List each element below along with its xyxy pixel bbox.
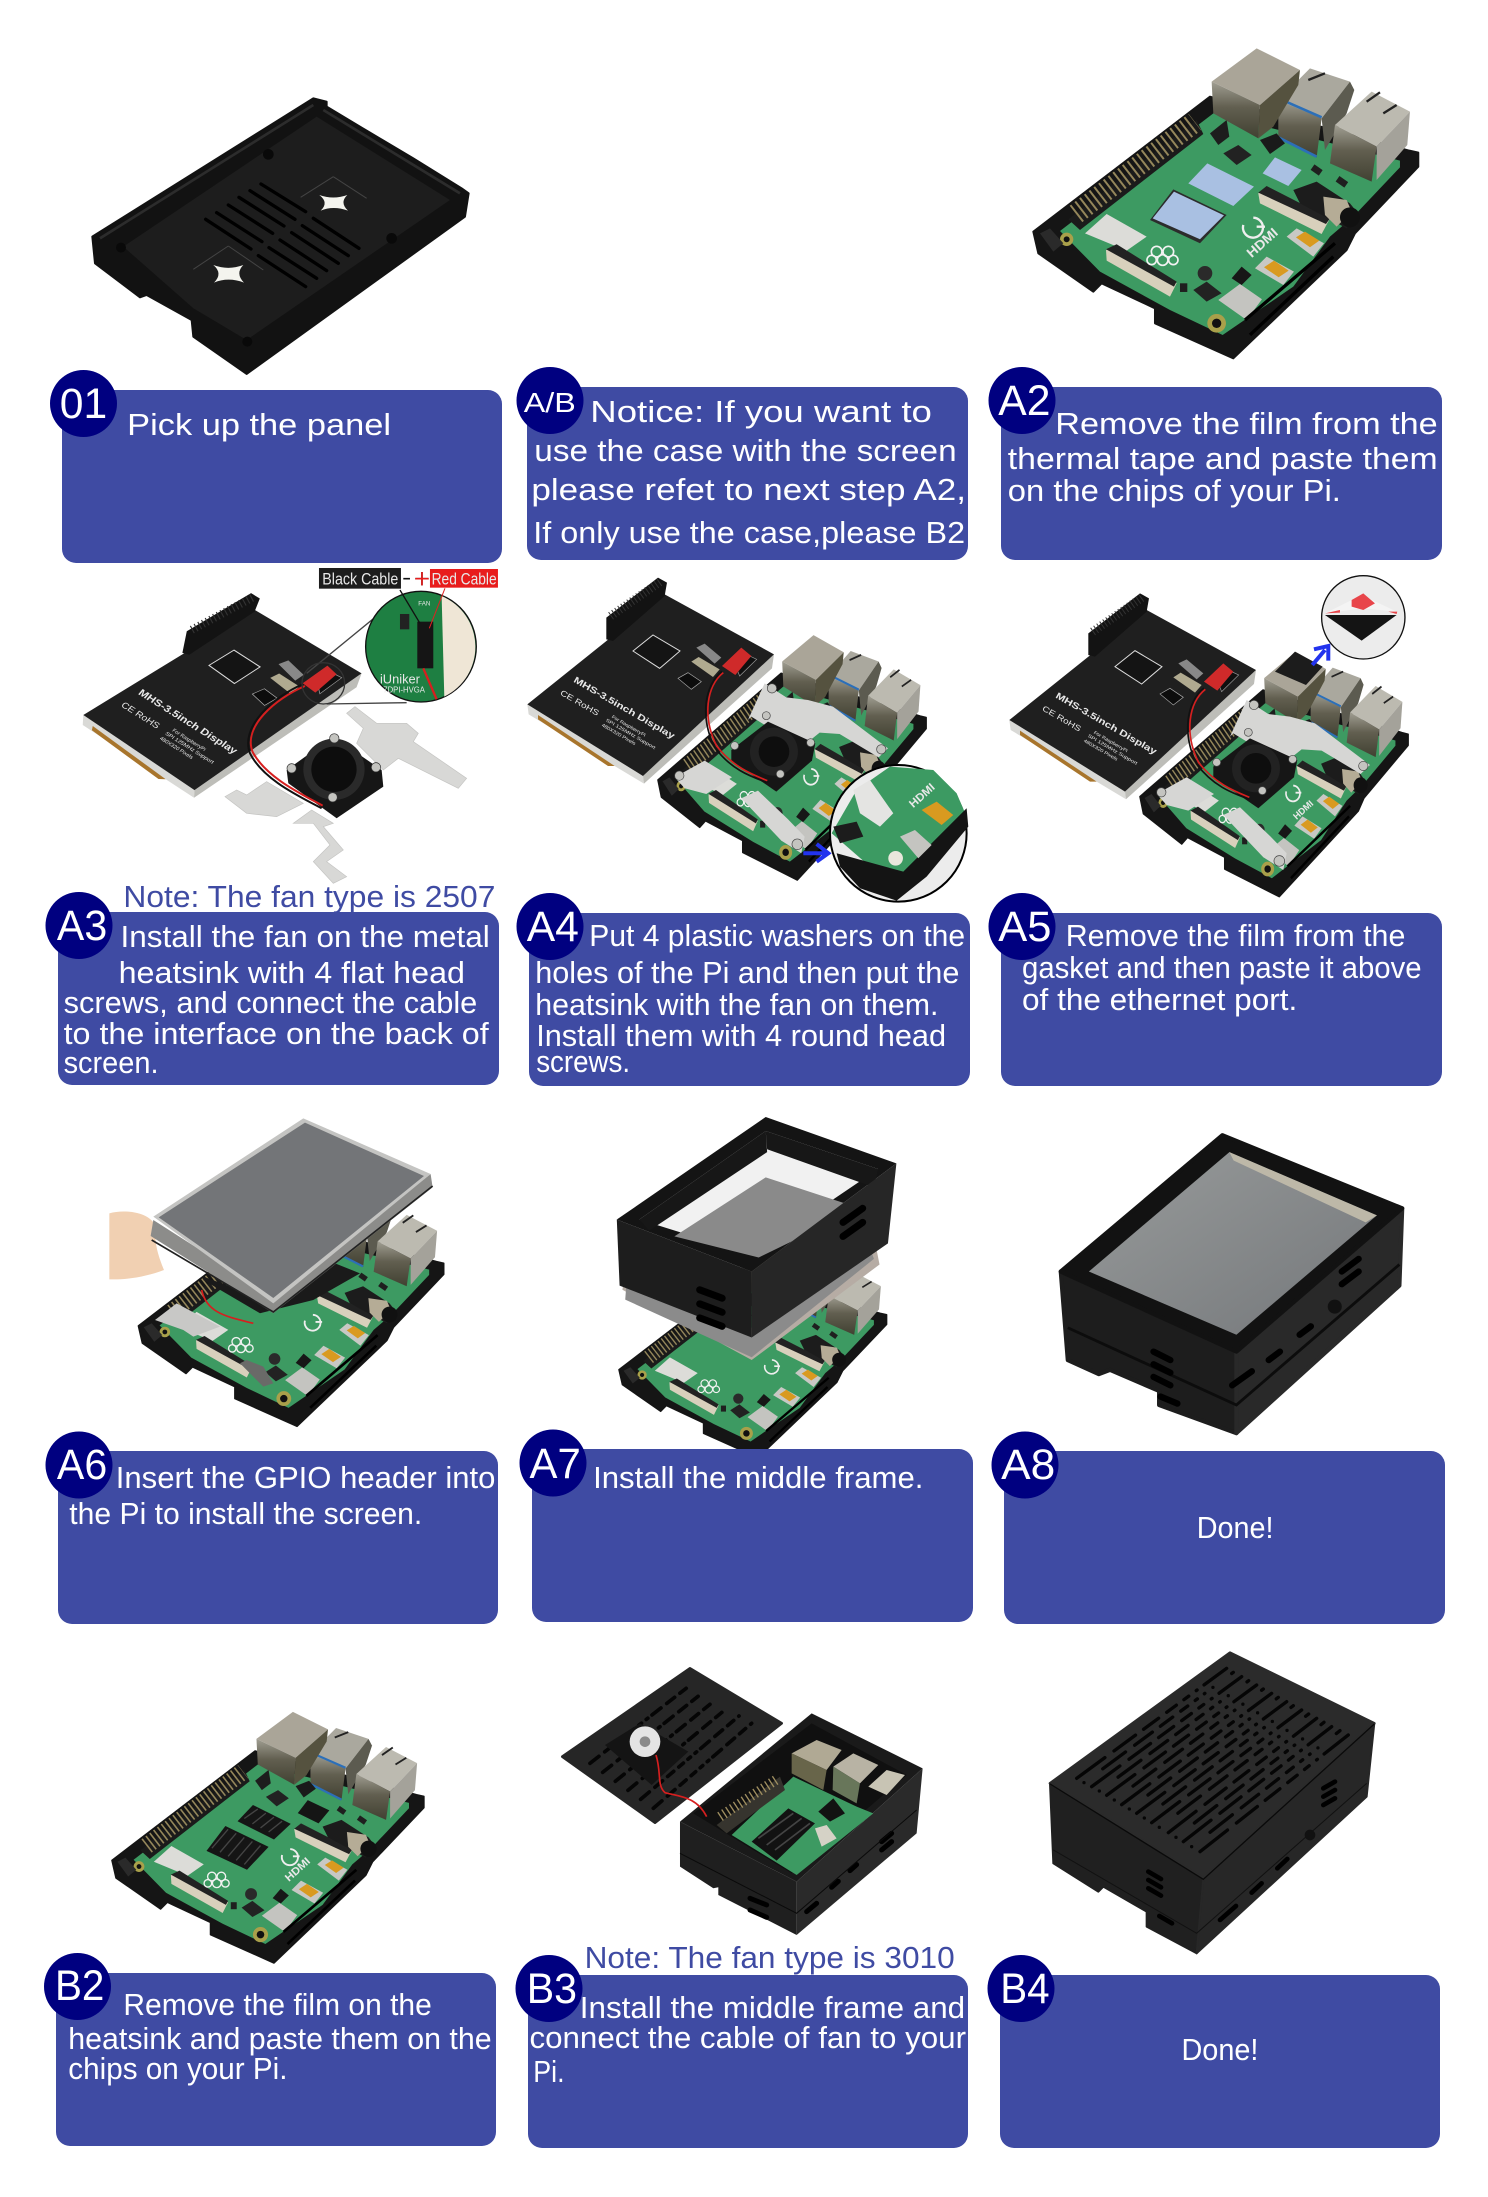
panel <box>528 1975 968 2148</box>
photo: case bottom panel <box>92 98 469 374</box>
arrow: to gasket inset <box>1312 646 1328 665</box>
instruction: holes of the Pi and then put the <box>535 955 959 990</box>
instruction: of the ethernet port. <box>1022 982 1297 1017</box>
instruction: Install the fan on the metal <box>120 919 490 954</box>
badge: A/B <box>524 387 576 418</box>
instruction <box>535 918 965 1079</box>
gasket on port <box>1275 652 1323 685</box>
step 01 <box>50 370 502 563</box>
badge <box>516 367 584 434</box>
fan <box>287 734 383 818</box>
instruction: use the case with the screen <box>534 433 957 468</box>
instruction: the Pi to install the screen. <box>69 1496 422 1531</box>
badge: A8 <box>1001 1441 1055 1489</box>
metal heatsink <box>225 707 467 883</box>
step B4 <box>988 1955 1440 2148</box>
instruction: Pick up the panel <box>127 407 391 442</box>
photo: Pi with heatsinks <box>112 1712 424 1963</box>
instruction: heatsink and paste them on the <box>68 2021 492 2056</box>
instruction: Insert the GPIO header into <box>116 1460 495 1495</box>
badge <box>46 1432 112 1498</box>
badge: A7 <box>530 1440 581 1488</box>
lid with fan <box>562 1668 782 1823</box>
arrow: to washer inset <box>803 844 828 862</box>
instruction: screen. <box>64 1045 158 1080</box>
inset: gasket <box>1322 576 1405 659</box>
open box <box>680 1713 923 1935</box>
instruction: please refet to next step A2, <box>531 472 966 507</box>
photo: gasket on ethernet port: CE RoHS <box>1041 704 1083 733</box>
instruction: Notice: If you want to <box>590 394 932 429</box>
step B3 <box>516 1955 968 2148</box>
badge: B2 <box>55 1962 104 2010</box>
instruction: chips on your Pi. <box>68 2051 288 2086</box>
badge <box>516 1955 582 2022</box>
display board: MHS-3.5inch Display <box>136 687 240 757</box>
step A/B <box>516 367 968 560</box>
fan cable <box>248 684 323 808</box>
photo: middle frame over the screen <box>617 1117 896 1458</box>
photo: gasket on ethernet port: For RaspberryPi <box>1093 730 1129 753</box>
instruction: heatsink with 4 flat head <box>119 955 465 990</box>
display board: SPI 125MHz Support <box>163 731 216 766</box>
badge <box>516 893 584 960</box>
badge: A5 <box>998 903 1052 951</box>
photo: screen and fan on metal heatsink <box>67 568 498 883</box>
badge <box>520 1430 586 1496</box>
step A4 <box>516 893 970 1086</box>
badge: A6 <box>57 1441 107 1489</box>
instruction: gasket and then paste it above <box>1022 950 1422 985</box>
instruction: screws, and connect the cable <box>64 985 477 1020</box>
display board: For RaspberryPi <box>171 728 207 753</box>
photo: Raspberry Pi with thermal pads: HDMI <box>1244 225 1281 261</box>
photo: fan heatsink installed on Pi <box>527 578 968 902</box>
magnifier lines <box>307 613 407 704</box>
panel <box>58 912 499 1085</box>
instruction <box>64 919 490 1080</box>
photo: gasket on ethernet port: HDMI <box>1291 798 1315 821</box>
side vents and ports <box>1148 1782 1335 1923</box>
panel <box>527 387 968 560</box>
instruction: heatsink with the fan on them. <box>535 987 938 1022</box>
note: fan type 2507: Note: The fan type is 2507 <box>123 879 495 914</box>
badge <box>46 892 112 959</box>
instruction: Install the middle frame. <box>593 1460 923 1495</box>
instruction: connect the cable of fan to your <box>530 2020 966 2055</box>
panel <box>62 390 502 563</box>
inset: fan header: iUniker <box>380 672 420 686</box>
badge: A2 <box>998 377 1050 425</box>
photo: inserting screen on the Pi <box>109 1118 444 1426</box>
step A7 <box>520 1430 973 1622</box>
instruction <box>530 1990 966 2089</box>
display board <box>67 589 377 802</box>
instruction <box>69 1460 495 1531</box>
badge <box>50 370 117 437</box>
photo: Raspberry Pi with thermal pads <box>1033 48 1418 358</box>
touch screen <box>151 1118 433 1313</box>
step A3 <box>46 892 499 1085</box>
panel <box>56 1973 496 2146</box>
panel <box>1001 913 1442 1086</box>
instruction: Remove the film from the <box>1055 406 1438 441</box>
inset: fan header: 7DPI-HVGA <box>383 686 426 695</box>
inset: plastic washer: HDMI <box>907 782 938 811</box>
inset: plastic washer <box>830 765 968 902</box>
frame <box>617 1117 896 1338</box>
instruction <box>1008 406 1438 508</box>
step A5 <box>988 893 1442 1086</box>
badge <box>992 1432 1058 1498</box>
photo: assembled case with screen <box>1061 1135 1402 1433</box>
badge: A3 <box>57 902 107 950</box>
photo: fan heatsink installed on Pi: MHS-3.5inch Display <box>572 675 677 741</box>
instruction: Done! <box>1182 2032 1258 2067</box>
fan cable <box>656 1755 707 1817</box>
photo: fan heatsink installed on Pi: 480X320 Pixels <box>601 723 637 746</box>
photo: fan heatsink installed on Pi: SPI 125MHz Support <box>605 718 657 751</box>
badge <box>988 367 1056 434</box>
photo: Pi with heatsinks: HDMI <box>283 1855 313 1884</box>
polarity signs <box>403 572 429 585</box>
step A6 <box>46 1432 498 1624</box>
photo: fan heatsink installed on Pi: CE RoHS <box>559 688 601 718</box>
instruction: thermal tape and paste them <box>1008 441 1438 476</box>
inset: fan header <box>366 588 476 702</box>
cable label: red: Red Cable <box>432 569 497 588</box>
panel <box>1001 387 1442 560</box>
instruction: Put 4 plastic washers on the <box>589 918 965 953</box>
display board: 480X320 Pixels <box>158 736 195 761</box>
instruction: Remove the film on the <box>123 1987 432 2022</box>
instruction <box>68 1987 492 2086</box>
badge: 01 <box>60 380 107 428</box>
step A2 <box>988 367 1442 560</box>
instruction <box>1022 918 1422 1017</box>
photo: assembled closed case <box>1050 1653 1374 1953</box>
instruction: on the chips of your Pi. <box>1008 473 1341 508</box>
display board: CE RoHS <box>119 700 163 731</box>
cable label: black: Black Cable <box>322 569 398 588</box>
photo: gasket on ethernet port <box>1009 576 1408 897</box>
photo: gasket on ethernet port: 480X320 Pixels <box>1083 738 1119 762</box>
badge <box>44 1953 111 2020</box>
badge: B3 <box>527 1965 577 2013</box>
badge: B4 <box>1000 1965 1050 2013</box>
instruction: screws. <box>536 1044 630 1079</box>
photo: gasket on ethernet port: SPI 125MHz Support <box>1087 733 1139 766</box>
instruction: Remove the film from the <box>1066 918 1405 953</box>
badge <box>988 893 1056 960</box>
panel <box>529 913 970 1086</box>
instruction: to the interface on the back of <box>64 1016 489 1051</box>
badge <box>988 1955 1054 2022</box>
screen <box>622 1222 880 1360</box>
panel <box>532 1449 973 1622</box>
instruction <box>531 394 966 550</box>
photo: case with fan lid opened <box>562 1668 923 1935</box>
instruction: Install them with 4 round head <box>536 1018 946 1053</box>
panel <box>1004 1451 1445 1624</box>
photo: gasket on ethernet port: MHS-3.5inch Display <box>1054 690 1159 757</box>
inset: fan header: FAN <box>418 601 430 608</box>
step B2 <box>44 1953 496 2146</box>
step A8 <box>992 1432 1445 1624</box>
lid slots <box>1077 1668 1348 1852</box>
panel <box>58 1451 498 1624</box>
instruction: Install the middle frame and <box>580 1990 965 2025</box>
note: fan type 3010: Note: The fan type is 3010 <box>585 1940 955 1975</box>
instruction: If only use the case,please B2 <box>533 515 965 550</box>
panel <box>1000 1975 1440 2148</box>
finger <box>109 1211 164 1279</box>
instruction: Done! <box>1197 1510 1274 1545</box>
photo: fan heatsink installed on Pi: For RaspberryPi <box>611 714 647 738</box>
badge: A4 <box>527 903 579 951</box>
instruction: Pi. <box>533 2054 565 2089</box>
